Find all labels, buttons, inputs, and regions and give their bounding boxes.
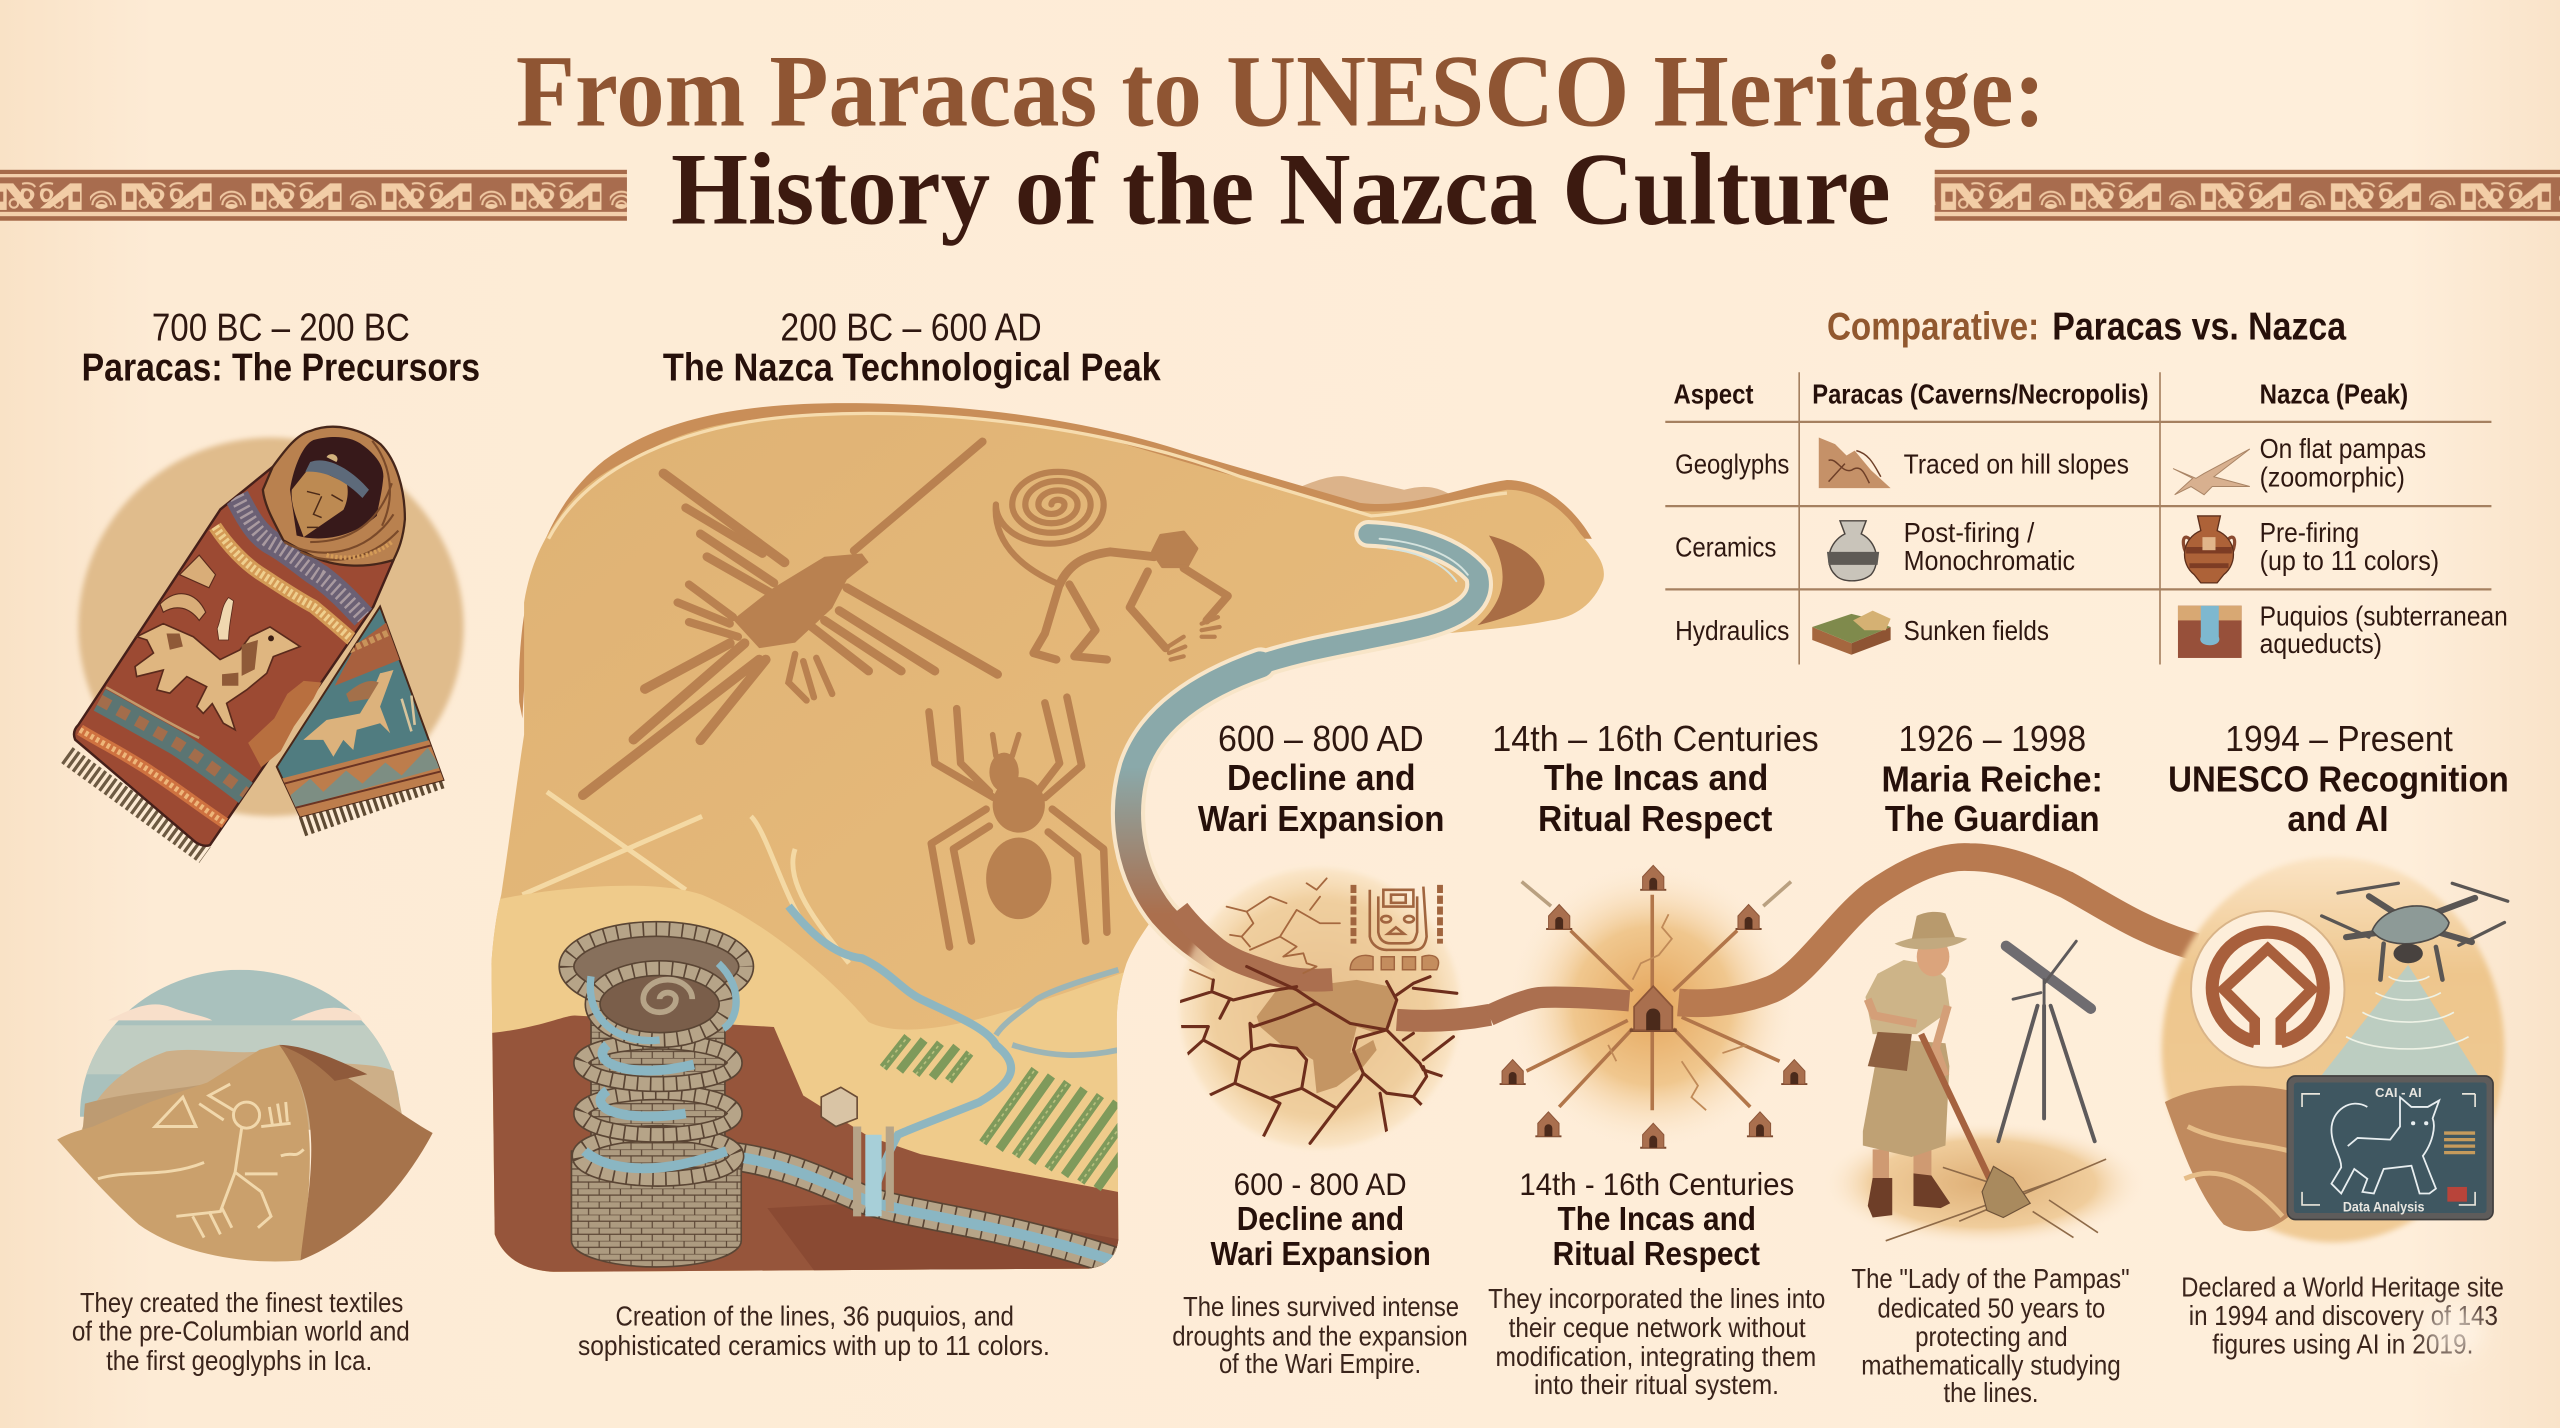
text: Paracas description: of the pre-Columbian world and [72,1315,410,1346]
text: Maria Reiche description [1851,1263,2130,1408]
comparative heading [1827,306,2347,349]
row: hydraulics: aqueducts) [2260,628,2382,659]
table header: Paracas (Caverns/Necropolis) [1812,378,2149,409]
icon: hill [1819,438,1891,488]
text: Incas lower heading and description: They incorporated the lines into [1488,1283,1825,1314]
text: Maria Reiche description: protecting and [1915,1321,2068,1352]
text: Incas lower heading and description: 14th - 16th Centuries [1519,1167,1794,1202]
timeline from central hut to UNESCO [1678,857,2196,1003]
text: Nazca description: sophisticated ceramics with up to 11 colors. [578,1330,1050,1361]
heading: Nazca peak [663,306,1161,389]
text: Maria Reiche description: dedicated 50 years to [1878,1293,2105,1324]
ceque lines [1522,882,1791,1110]
comparative heading: Comparative: [1827,306,2039,349]
eroded centre [1257,980,1397,1093]
text: Incas lower heading and description: modification, integrating them [1496,1341,1816,1372]
text: Nazca description: Creation of the lines, 36 puquios, and [616,1301,1014,1332]
map desert ground [491,413,1604,1272]
text: UNESCO description [2181,1271,2504,1359]
heading: Incas (upper) [1492,718,1819,839]
title [516,35,2046,247]
row: ceramics [1675,516,2439,583]
row: hydraulics: Hydraulics [1675,615,1789,646]
heading: Decline and Wari (upper): Decline and [1227,757,1416,798]
icon: puquio section [2178,606,2242,658]
text: Incas lower heading and description: their ceque network without [1509,1312,1806,1343]
heading: Paracas: 700 BC – 200 BC [152,306,410,349]
heading: Nazca peak: 200 BC – 600 AD [780,306,1042,349]
geoglyph: spider [929,697,1107,947]
title: From Paracas to UNESCO Heritage: [516,35,2046,149]
map stone block [821,1087,857,1127]
river timeline: blue to brown [1128,534,1479,973]
text: Decline lower heading and description [1172,1167,1468,1379]
row: geoglyphs: On flat pampas [2260,433,2426,464]
map sand streaks [522,792,849,963]
icon: red amphora [2183,516,2235,583]
fine cracks [1190,878,1340,980]
sketched lines on ground [1886,1159,2106,1241]
textile backdrop circle [78,438,464,816]
row: hydraulics: Puquios (subterranean [2260,600,2508,631]
heading: Decline and Wari (upper): Wari Expansion [1198,798,1444,839]
AI tablet: Data Analysis [2343,1198,2425,1214]
textile back panel [277,607,447,827]
geoglyph: monkey [996,472,1228,660]
heading: UNESCO: 1994 – Present [2225,718,2453,759]
text: Incas lower heading and description: Ritual Respect [1553,1236,1760,1273]
row: ceramics: Post-firing / [1904,517,2035,548]
icon: grey pot [1827,521,1879,581]
text: Incas lower heading and description [1488,1167,1825,1400]
broom [1921,1034,2030,1217]
map end dune crescent [1478,536,1545,625]
table header: Aspect [1673,378,1753,409]
text: Incas lower heading and description: into their ritual system. [1534,1369,1779,1400]
heading: Maria Reiche [1881,718,2103,839]
map lower terrain [490,886,1127,1273]
map fields [883,1037,1149,1189]
heading: UNESCO: UNESCO Recognition [2168,758,2509,799]
hillside geoglyph [98,1084,304,1238]
text: Decline lower heading and description: The lines survived intense [1183,1291,1459,1322]
text: Decline lower heading and description: Decline and [1237,1201,1404,1238]
heading: Maria Reiche: Maria Reiche: [1881,758,2103,799]
text: UNESCO description: figures using AI in 2019. [2212,1328,2473,1359]
illustration: Paracas textile [67,427,464,855]
illustration: cracked earth with Wari figure [1178,868,1490,1148]
woman [1863,912,1967,1217]
map outer rim [519,403,1592,718]
row: ceramics: (up to 11 colors) [2260,545,2439,576]
ground shadow [1824,1122,2144,1246]
title: History of the Nazca Culture [671,133,1891,247]
heading: Nazca peak: The Nazca Technological Peak [663,346,1161,389]
text: Decline lower heading and description: droughts and the expansion [1172,1320,1468,1351]
table header: Nazca (Peak) [2260,378,2408,409]
heading: UNESCO: and AI [2287,798,2389,839]
Wari staff figure [1350,885,1440,970]
sky [80,970,400,1117]
row: hydraulics [1675,600,2508,659]
textile small motifs [160,555,216,620]
row: ceramics: Ceramics [1675,532,1776,563]
row: geoglyphs [1675,433,2426,495]
text: Paracas description [72,1287,410,1376]
text: Nazca description [578,1301,1050,1361]
map soil cross-section [487,1016,1127,1273]
panel: Nazca pampa map [487,403,1604,1273]
AI tablet: CAI - AI [2375,1085,2422,1100]
huts [1500,865,1807,1148]
AI tablet [2287,1076,2493,1220]
text: Maria Reiche description: The "Lady of the Pampas" [1851,1263,2130,1294]
timeline into central hut [1489,997,1629,1016]
map distant hills [1273,476,1469,516]
text: Incas lower heading and description: The Incas and [1558,1201,1756,1238]
illustration: UNESCO and AI [2162,857,2508,1242]
row: hydraulics: Sunken fields [1904,615,2049,646]
map rim highlight [549,413,1507,539]
text: Maria Reiche description: mathematically studying [1861,1349,2121,1380]
icon: sunken field [1812,611,1891,655]
scan beam [2321,965,2478,1076]
clouds [108,1004,362,1020]
textile dragon motif [135,624,300,730]
illustration: Inca ceque network [1489,857,2196,1149]
text: Maria Reiche description: the lines. [1944,1377,2039,1408]
text: Decline lower heading and description: Wari Expansion [1210,1236,1431,1273]
decorative band left [0,170,627,221]
comparison table [1665,372,2508,664]
text: UNESCO description: in 1994 and discovery of 143 [2189,1300,2498,1331]
row: ceramics: Monochromatic [1904,545,2075,576]
textile head wrap [263,427,405,566]
dunes [2165,1086,2289,1231]
table header [1673,378,2408,409]
heading: Decline and Wari (upper) [1198,718,1444,839]
text: Paracas description: the first geoglyphs in Ica. [106,1345,372,1376]
drone [2322,883,2508,980]
map river branches [789,906,1011,1216]
white smudge over caption [2424,1304,2483,1357]
comparative heading: Paracas vs. Nazca [2052,306,2347,349]
heading: Incas (upper): Ritual Respect [1538,798,1772,839]
map canal [730,1156,1127,1265]
textile front panel [67,467,393,855]
illustration: Maria Reiche [1824,912,2144,1246]
decorative band right [1935,170,2560,221]
text: Decline lower heading and description: of the Wari Empire. [1219,1348,1421,1379]
far hills [82,1050,405,1130]
UNESCO badge [2191,911,2344,1068]
deep cracks [1180,967,1457,1143]
heading: Decline and Wari (upper): 600 – 800 AD [1218,718,1424,759]
circle backdrop [2162,857,2504,1242]
mountain [57,1045,310,1262]
row: geoglyphs: Geoglyphs [1675,448,1789,479]
text: Paracas description: They created the finest textiles [80,1287,403,1318]
heading: Paracas: Paracas: The Precursors [82,346,480,389]
heading: Incas (upper): The Incas and [1544,757,1768,798]
timeline through circle [1178,910,1490,1021]
heading: Maria Reiche: 1926 – 1998 [1898,718,2086,759]
icon: flat pampas bird [2173,449,2250,495]
heading: UNESCO [2168,718,2509,839]
row: geoglyphs: Traced on hill slopes [1904,448,2129,479]
telescope on tripod [1998,941,2095,1141]
illustration: Ica hill geoglyphs [57,970,433,1262]
geoglyph: hummingbird [583,442,998,795]
heading: Maria Reiche: The Guardian [1885,798,2100,839]
heading: Paracas [82,306,480,389]
heading: Incas (upper): 14th – 16th Centuries [1492,718,1819,759]
puquio spiral well [567,929,746,1267]
text: Decline lower heading and description: 600 - 800 AD [1234,1167,1407,1202]
row: geoglyphs: (zoomorphic) [2260,462,2405,493]
row: ceramics: Pre-firing [2260,517,2359,548]
text: UNESCO description: Declared a World Heritage site [2181,1271,2504,1302]
